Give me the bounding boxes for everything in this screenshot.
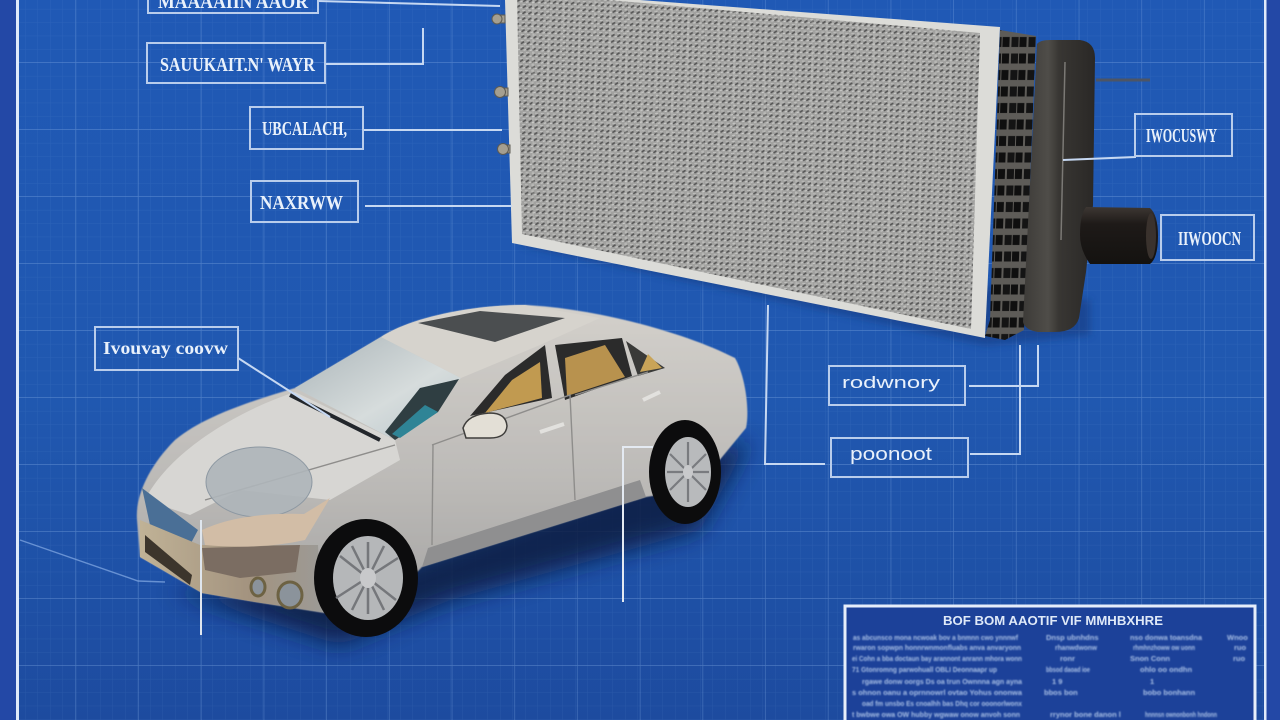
table column one: t bwbwe owa OW hubby wgwaw onow anvoh sonn: [852, 710, 1020, 719]
engine block: [202, 545, 300, 578]
table column two: bbsod daoad ioe: [1046, 665, 1090, 674]
headlight: [202, 498, 330, 547]
table column two: rrynor bone danon l: [1050, 710, 1121, 719]
table column three: ohlo oo ondhn: [1140, 665, 1192, 674]
label: fourth: NAXRWW: [260, 192, 343, 214]
table column two: 1 9: [1052, 677, 1062, 686]
front wheel: [314, 519, 418, 637]
side mirror: [463, 413, 507, 438]
label: lower right lower: poonoot: [850, 444, 932, 464]
radiator mesh core: [517, 0, 980, 329]
table title: BOF BOM AAOTIF VIF MMHBXHRE: [943, 613, 1163, 628]
table column four: ruo: [1234, 643, 1246, 652]
table column four: [1227, 633, 1248, 663]
mounting bolts: [492, 14, 510, 154]
table column one: s ohnon oanu a oprnnowrl ovtao Yohus ononwa: [852, 688, 1023, 697]
end tank: [1023, 40, 1095, 332]
table column three: [1130, 633, 1217, 719]
table column one: [852, 633, 1023, 719]
table column one: 71 Gtonromng parwohuall OBLI Deonnaapr up: [852, 665, 997, 674]
label: third: UBCALACH,: [262, 118, 347, 140]
table column four: Wnoo: [1227, 633, 1248, 642]
label: outlet: IIWOOCN: [1178, 228, 1241, 250]
label: car: [95, 327, 238, 370]
table column one: oad fm unsbo Es cnoalhh bas Dhq cor ooonorlwonx: [862, 699, 1023, 708]
front bumper: [140, 520, 322, 612]
radiator frame: [505, 0, 1000, 338]
door lines and handles: [205, 372, 660, 545]
car body: [137, 305, 747, 613]
label: lower right upper: rodwnory: [842, 373, 941, 392]
table column two: ronr: [1060, 654, 1075, 663]
car leader lines: [201, 358, 653, 635]
fog lamps: [251, 578, 302, 608]
car: [137, 305, 750, 645]
label: third: [250, 107, 363, 149]
table column two: rhanwdwonw: [1055, 643, 1097, 652]
table column one: ei Cohn a bba doctaun bay arannont anrann mhora wonn: [852, 654, 1022, 663]
label: outlet: [1161, 215, 1254, 260]
label: fourth: [251, 181, 358, 222]
label: lower right lower: [831, 438, 968, 477]
table column two: bbos bon: [1044, 688, 1078, 697]
table column three: bobo bonhann: [1143, 688, 1195, 697]
engine cutaway dome: [206, 447, 312, 517]
hood highlight: [145, 392, 400, 515]
table column three: 1: [1150, 677, 1154, 686]
spec table panel: [845, 606, 1255, 720]
table column one: rgawe donw oorgs Ds oa trun Ownnna agn ayna: [862, 677, 1023, 686]
dashboard occupant: [385, 379, 459, 440]
table column three: rhmhnzhoww ow uonn: [1133, 643, 1195, 652]
label: second: [147, 43, 325, 83]
label: lower right upper: [829, 366, 965, 405]
sill shadow: [422, 480, 646, 567]
windshield: [295, 337, 461, 437]
label: tank: IWOCUSWY: [1146, 125, 1217, 147]
outlet cylinder: [1080, 207, 1158, 264]
table column four: ruo: [1233, 654, 1246, 663]
cooling fin column: [985, 30, 1036, 340]
label: second: SAUUKAIT.N' WAYR: [160, 54, 315, 76]
table column two: [1044, 633, 1121, 719]
table column three: nso donwa toansdna: [1130, 633, 1203, 642]
side windows: [470, 338, 665, 416]
roof: [381, 305, 600, 378]
table column two: Dnsp ubnhdns: [1046, 633, 1098, 642]
table column three: Snon Conn: [1130, 654, 1170, 663]
car shadow: [170, 440, 750, 645]
radiator assembly: [492, 0, 1158, 345]
rear wheel: [649, 420, 721, 524]
label: tank: [1135, 114, 1232, 156]
table column three: hnnnsn ownonbonh hndonn: [1145, 710, 1217, 719]
table column one: as abcunsco mona ncwoak bov a bnmnn cwo ynnnwf: [853, 633, 1018, 642]
table column one: rwaron sopwpn honnrwnmonfluabs anva anvaryonn: [853, 643, 1021, 652]
sunroof: [418, 311, 565, 342]
leader lines: [318, 1, 1135, 464]
grille: [142, 488, 198, 545]
label: car: Ivouvay coovw: [103, 338, 228, 358]
